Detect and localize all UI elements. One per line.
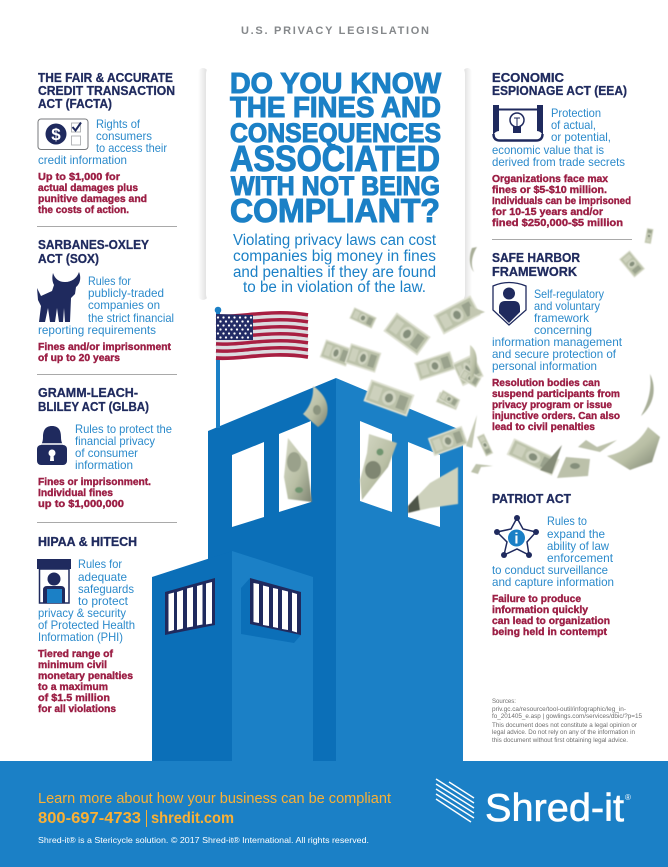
text block: HIPAA penalty [38,648,133,715]
text block: GLBA penalty [38,476,151,510]
panel: GLBA [37,385,172,510]
text block: Patriot Act description: and capture information [492,575,614,589]
text block: HIPAA penalty: for all violations [38,703,116,715]
heading: main title: COMPLIANT? [230,193,440,230]
heading: SOX: ACT (SOX) [38,251,99,266]
panel: Safe Harbor [492,250,623,433]
logo: Shred-it: ® [625,793,631,802]
heading: FACTA: THE FAIR & ACCURATE [38,70,173,85]
text block: Safe Harbor description [492,287,623,373]
right barred window [241,578,301,643]
heading: main title [230,68,442,230]
text block: Patriot Act penalty: being held in contempt [492,626,607,638]
text block: Patriot Act description: Rules to [547,514,587,528]
text block: Safe Harbor description: concerning [534,323,592,337]
text block: Patriot Act penalty: information quickly [492,604,588,616]
text block: Patriot Act penalty [492,593,610,638]
text block: HIPAA penalty: minimum civil [38,659,107,671]
heading: Safe Harbor: FRAMEWORK [492,264,578,279]
heading: main title: WITH NOT BEING [231,171,440,201]
text block: HIPAA penalty: monetary penalties [38,670,133,682]
text block: EEA description: economic value that is [492,143,604,157]
lower tower left face [152,551,232,761]
icon: dollar and checkboxes: $ [51,125,61,144]
text block: HIPAA description: Information (PHI) [38,630,123,644]
text block: SOX description: publicly-traded [88,286,164,300]
heading: FACTA: CREDIT TRANSACTION [38,83,175,98]
illustration: falling money [284,228,660,513]
text block: FACTA penalty: actual damages plus [38,182,138,194]
text block: Safe Harbor description: and secure protection of [492,347,617,361]
text block: contact details [38,810,234,827]
panel: EEA [492,70,631,229]
text block: subtitle: to be in violation of the law. [243,279,426,296]
upper tower left face [208,378,336,761]
text block: EEA description: or potential, [551,130,611,144]
logo: Shred-it: Shred-it [485,787,624,830]
panel: Patriot Act [492,491,614,638]
text block: sources and disclaimer: legal advice. Do not rely on any of the information in [492,729,636,736]
heading: FACTA [38,70,175,111]
icon: records window clerk [37,559,71,603]
text block: Patriot Act penalty: can lead to organization [492,615,610,627]
icon: dollar and checkboxes [38,119,88,150]
text block: GLBA description: financial privacy [75,434,155,448]
text block: sources and disclaimer: Sources: [492,698,516,705]
text block: HIPAA description: safeguards [78,582,134,596]
icon: sheriff star with info symbol: i [514,530,519,548]
text block: EEA penalty: for 10-15 years and/or [492,206,603,218]
text block: EEA penalty [492,173,631,229]
text block: SOX description: companies on [88,298,160,312]
text block: Patriot Act description: ability of law [547,539,609,553]
text block: GLBA description: of consumer [75,446,138,460]
text block: GLBA penalty: Individual fines [38,487,113,499]
text block: EEA penalty: Organizations face max [492,173,608,185]
section label: U.S. privacy legislation: U.S. PRIVACY LEGISLATION [241,25,429,37]
panel: title card [198,64,472,304]
heading: GLBA [38,385,149,414]
text block: GLBA description [75,422,172,472]
text block: EEA penalty: Individuals can be imprisoned [492,195,631,207]
text block: SOX description: Rules for [88,274,131,288]
text block: EEA description [492,106,625,169]
text block: Safe Harbor penalty [492,377,620,433]
text block: contact details: 800-697-4733 [38,810,141,827]
heading: SOX [38,237,149,266]
text block: Safe Harbor penalty: suspend participants from [492,388,620,400]
text block: subtitle [233,232,437,296]
text block: sources and disclaimer: fo_201405_e.asp | gowlings.com/services/dbic/?p=15 [492,713,643,720]
panel: FACTA [38,70,175,216]
text block: subtitle: Violating privacy laws can cost [233,232,437,249]
text block: HIPAA description: adequate [78,570,127,584]
text block: FACTA penalty [38,171,147,216]
icon: blueprint with light bulb [493,105,543,140]
heading: SOX: SARBANES-OXLEY [38,237,149,252]
text block: subtitle: companies big money in fines [233,248,436,265]
heading: HIPAA and HITECH: HIPAA & HITECH [38,534,137,549]
text block: SOX description: reporting requirements [38,323,156,337]
heading: main title: THE FINES AND [230,92,441,124]
heading: main title: CONSEQUENCES [230,118,441,148]
text block: HIPAA penalty: of $1.5 million [38,692,110,704]
text block: contact details: shredit.com [151,810,234,827]
heading: GLBA: BLILEY ACT (GLBA) [38,399,149,414]
text block: copyright: Shred-it® is a Stericycle solution. © 2017 Shred-it® International. All rights reserved. [38,835,369,845]
text block: EEA description: of actual, [551,118,596,132]
text block: Patriot Act description: enforcement [547,551,614,565]
text block: SOX penalty: of up to 20 years [38,352,120,364]
text block: HIPAA penalty: to a maximum [38,681,108,693]
heading: Safe Harbor [492,250,581,279]
text block: SOX penalty [38,341,171,364]
text block: SOX description: the strict financial [88,311,174,325]
heading: GLBA: GRAMM-LEACH- [38,385,138,400]
text block: FACTA penalty: punitive damages and [38,193,147,205]
heading: EEA [492,70,627,98]
text block: FACTA penalty: the costs of action. [38,204,129,216]
text block: Safe Harbor description: information management [492,335,623,349]
text block: Patriot Act description: to conduct surveillance [492,563,608,577]
text block: Patriot Act description [492,514,614,589]
text block: Safe Harbor penalty: privacy program or issue [492,399,612,411]
panel: footer [0,761,668,867]
text block: HIPAA description: privacy & security [38,606,126,620]
text block: FACTA description: credit information [38,153,127,167]
text block: FACTA description: Rights of [96,117,141,131]
text block: EEA description: Protection [551,106,601,120]
text block: FACTA description [38,117,167,167]
heading: EEA: ECONOMIC [492,70,565,85]
text block: SOX penalty: Fines and/or imprisonment [38,341,171,353]
text block: FACTA penalty: Up to $1,000 for [38,171,120,183]
text block: subtitle: and penalties if they are found [233,264,436,281]
upper tower windows [232,421,440,527]
text block: HIPAA description: Rules for [78,557,122,571]
icon: sheriff star with info symbol [494,515,539,558]
text block: Safe Harbor description: and voluntary [534,299,600,313]
heading: EEA: ESPIONAGE ACT (EEA) [492,83,627,98]
text block: Safe Harbor description: framework [534,311,590,325]
text block: sources and disclaimer: this document without first obtaining legal advice. [492,737,628,744]
text block: GLBA penalty: up to $1,000,000 [38,498,124,510]
heading: main title: DO YOU KNOW [230,68,442,100]
text block: sources and disclaimer: priv.gc.ca/resource/tool-outil/infographic/leg_in- [492,706,626,713]
icon: person with keyhole [37,426,67,465]
heading: main title: ASSOCIATED [230,138,440,179]
heading: Safe Harbor: SAFE HARBOR [492,250,581,265]
text block: FACTA description: to access their [96,141,167,155]
text block: Patriot Act penalty: Failure to produce [492,593,581,605]
text block: HIPAA description [38,557,135,644]
text block: GLBA penalty: Fines or imprisonment. [38,476,151,488]
text block: HIPAA description: to protect [78,594,129,608]
text block: GLBA description: information [75,458,133,472]
panel: HIPAA and HITECH [37,534,137,715]
text block: sources and disclaimer [492,698,643,744]
text block: Safe Harbor description: personal information [492,359,597,373]
panel: SOX [37,237,174,364]
text block: EEA penalty: fined $250,000-$5 million [492,217,623,229]
text block: FACTA description: consumers [96,129,152,143]
illustration: American flag [215,307,308,428]
left barred window [165,578,215,635]
text block: EEA description: derived from trade secrets [492,155,625,169]
logo: Shred-it [436,779,631,830]
text block: call to action: Learn more about how your business can be compliant [38,790,392,807]
text block: Safe Harbor penalty: Resolution bodies can [492,377,600,389]
text block: Safe Harbor penalty: injunctive orders. Can also [492,410,620,422]
lower tower right face [232,551,313,761]
heading: FACTA: ACT (FACTA) [38,96,112,111]
upper tower right face [336,378,463,761]
text block: HIPAA description: of Protected Health [38,618,135,632]
text block: sources and disclaimer: This document does not constitute a legal opinion or [492,722,637,729]
text block: GLBA description: Rules to protect the [75,422,172,436]
icon: shield with person [493,282,526,325]
text block: EEA penalty: fines or $5-$10 million. [492,184,607,196]
icon: bull [37,272,80,322]
text block: HIPAA penalty: Tiered range of [38,648,113,660]
text block: Patriot Act description: expand the [547,527,605,541]
heading: Patriot Act: PATRIOT ACT [492,491,571,506]
illustration: building [152,378,463,761]
text block: Safe Harbor description: Self-regulatory [534,287,604,301]
text block: SOX description [38,274,174,337]
text block: Safe Harbor penalty: lead to civil penalties [492,421,595,433]
